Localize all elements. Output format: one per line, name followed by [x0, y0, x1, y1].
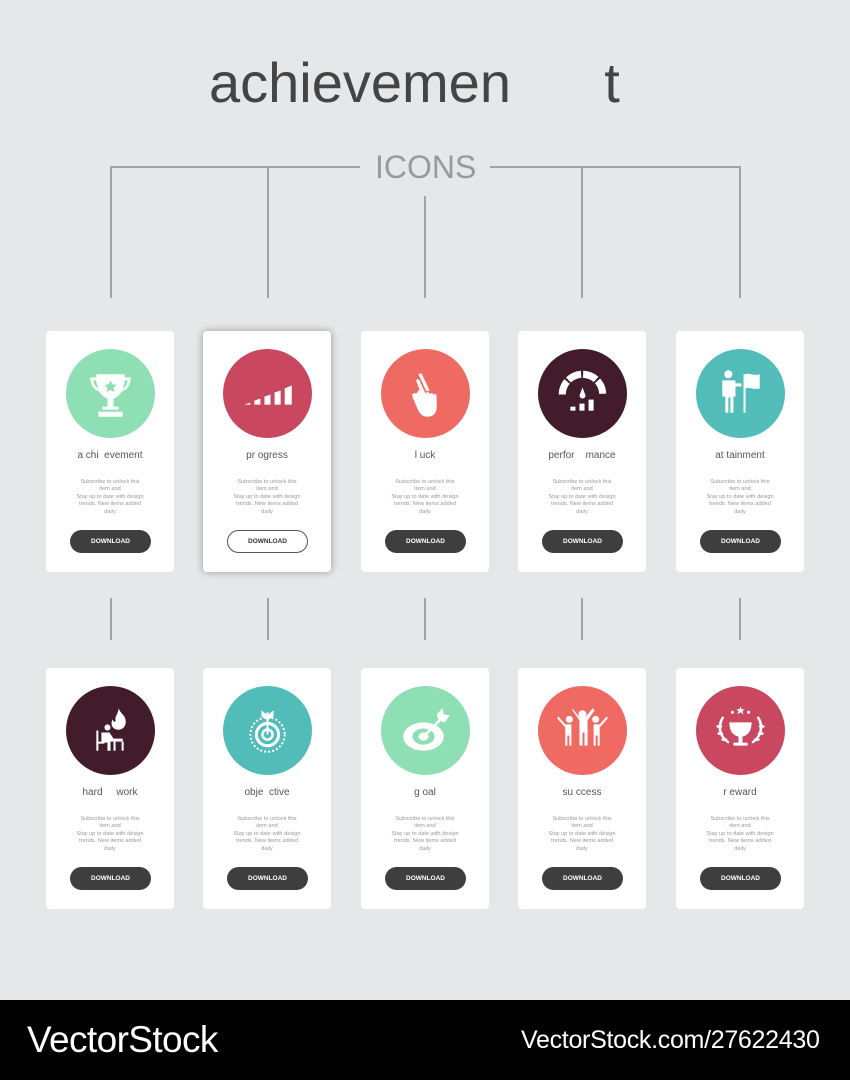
icon: person at desk with fire — [66, 686, 155, 775]
description: Stay up to date with design trends. New items added daily — [706, 494, 774, 515]
connector lines top — [110, 166, 741, 298]
label: pr ogress — [246, 450, 288, 461]
icon: crossed fingers — [381, 349, 470, 438]
button: DOWNLOAD — [248, 538, 287, 545]
icon: gauge — [538, 349, 627, 438]
description — [233, 479, 301, 515]
description — [76, 816, 144, 852]
connector lines middle — [110, 598, 741, 640]
icon: trophy — [66, 349, 155, 438]
button: DOWNLOAD — [563, 538, 602, 545]
button: DOWNLOAD — [563, 875, 602, 882]
description: Stay up to date with design trends. New items added daily — [706, 831, 774, 852]
subtitle: ICONS: ICONS — [375, 149, 476, 185]
button — [227, 530, 308, 553]
icon: trophy with laurels — [696, 686, 785, 775]
label: r eward — [723, 787, 757, 798]
description — [76, 479, 144, 515]
card: achievement — [46, 331, 174, 572]
card: performance — [518, 331, 646, 572]
description — [233, 816, 301, 852]
icon: person with flag — [696, 349, 785, 438]
description — [548, 816, 616, 852]
button — [227, 867, 308, 890]
label: su ccess — [563, 787, 601, 798]
label: l uck — [415, 450, 435, 461]
description: Subscribe to unlock this item and — [80, 479, 140, 492]
button: DOWNLOAD — [721, 875, 760, 882]
icon: target with arrow — [223, 686, 312, 775]
icon: dart board — [381, 686, 470, 775]
label: at tainment — [715, 450, 765, 461]
label: g oal — [414, 787, 436, 798]
card: attainment — [676, 331, 804, 572]
label: a chi evement — [77, 450, 143, 461]
card: reward — [676, 668, 804, 909]
label: hard work — [82, 787, 138, 798]
description: Stay up to date with design trends. New items added daily — [548, 831, 616, 852]
description: Subscribe to unlock this item and — [710, 479, 770, 492]
description: Stay up to date with design trends. New items added daily — [233, 494, 301, 515]
button — [70, 867, 151, 890]
button — [542, 867, 623, 890]
icon: three cheering people — [538, 686, 627, 775]
label: perfor mance — [548, 450, 616, 461]
description: Subscribe to unlock this item and — [710, 816, 770, 829]
description: Subscribe to unlock this item and — [395, 816, 455, 829]
footer brand: VectorStock — [27, 1019, 218, 1060]
description: Stay up to date with design trends. New items added daily — [76, 494, 144, 515]
button — [385, 867, 466, 890]
button — [700, 530, 781, 553]
button: DOWNLOAD — [91, 875, 130, 882]
button: DOWNLOAD — [406, 538, 445, 545]
description: Stay up to date with design trends. New items added daily — [76, 831, 144, 852]
description: Stay up to date with design trends. New items added daily — [391, 831, 459, 852]
description — [391, 816, 459, 852]
description: Subscribe to unlock this item and — [237, 479, 297, 492]
button — [700, 867, 781, 890]
description: Stay up to date with design trends. New items added daily — [548, 494, 616, 515]
description: Subscribe to unlock this item and — [395, 479, 455, 492]
card: success — [518, 668, 646, 909]
description — [706, 816, 774, 852]
description: Subscribe to unlock this item and — [552, 816, 612, 829]
button: DOWNLOAD — [248, 875, 287, 882]
card: objective — [203, 668, 331, 909]
icon: bars — [223, 349, 312, 438]
card: hard work — [46, 668, 174, 909]
description: Stay up to date with design trends. New items added daily — [391, 494, 459, 515]
button: DOWNLOAD — [721, 538, 760, 545]
description: Subscribe to unlock this item and — [552, 479, 612, 492]
description: Subscribe to unlock this item and — [80, 816, 140, 829]
button: DOWNLOAD — [406, 875, 445, 882]
button — [385, 530, 466, 553]
description: Stay up to date with design trends. New items added daily — [233, 831, 301, 852]
button: DOWNLOAD — [91, 538, 130, 545]
description: Subscribe to unlock this item and — [237, 816, 297, 829]
description — [548, 479, 616, 515]
button — [70, 530, 151, 553]
description — [391, 479, 459, 515]
label: obje ctive — [244, 787, 290, 798]
footer bar — [0, 1000, 850, 1080]
card: luck — [361, 331, 489, 572]
card: goal — [361, 668, 489, 909]
button — [542, 530, 623, 553]
description — [706, 479, 774, 515]
footer url: VectorStock.com/27622430 — [521, 1026, 820, 1054]
title: achievemen t — [209, 51, 620, 114]
card: progress — [203, 331, 331, 572]
